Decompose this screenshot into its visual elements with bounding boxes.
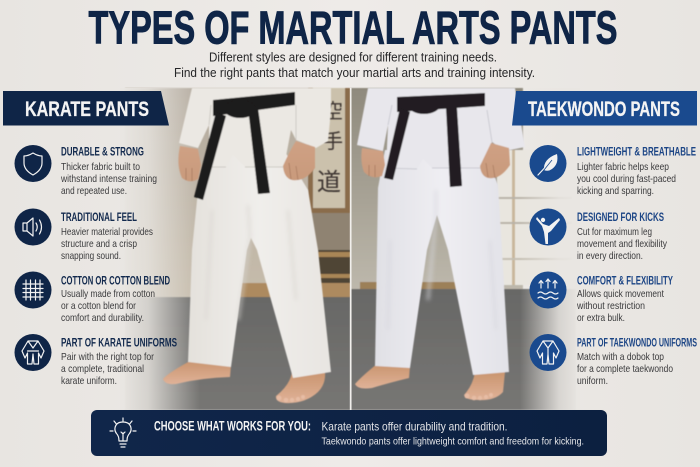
feature: comfort and flexibility: Allows quick movement	[577, 288, 664, 300]
feature: part of karate uniforms	[14, 334, 177, 387]
icon: karate gi	[14, 334, 52, 371]
feature: lightweight and breathable: kicking and sparring.	[577, 185, 654, 197]
feature: cotton or cotton blend: Usually made from cotton	[61, 288, 155, 300]
feet	[355, 364, 505, 400]
photo: taekwondo pants	[351, 88, 580, 410]
taekwondo figure	[355, 88, 525, 400]
wall scroll calligraphy: 手	[323, 130, 343, 153]
feature: durable and strong	[14, 144, 157, 197]
left edge fade	[120, 88, 200, 410]
subtitle	[174, 50, 535, 80]
pant folds	[206, 205, 296, 320]
feature: lightweight and breathable: you cool during fast-paced	[577, 173, 676, 185]
banner: karate pants: KARATE PANTS	[25, 97, 149, 121]
callout: choose what works for you	[91, 410, 607, 456]
icon: arrows over waves	[530, 272, 566, 308]
icon: kicking figure	[530, 208, 566, 246]
icon: light bulb	[110, 418, 136, 447]
feature: traditional feel: TRADITIONAL FEEL	[61, 210, 137, 224]
feature: comfort and flexibility: or extra bulk.	[577, 312, 625, 324]
banner: taekwondo pants	[512, 91, 697, 126]
wall scroll calligraphy: 空	[323, 100, 343, 123]
feature: durable and strong: and repeated use.	[61, 185, 127, 197]
feature: part of taekwondo uniforms	[530, 334, 697, 387]
feature: durable and strong: withstand intense training	[60, 173, 157, 185]
icon: shield	[14, 145, 52, 182]
feature: cotton or cotton blend: COTTON OR COTTON BLEND	[61, 274, 170, 288]
icon: speaker	[14, 208, 52, 246]
feature: designed for kicks: Cut for maximum leg	[577, 226, 652, 238]
pants	[375, 150, 509, 375]
photo divider	[350, 88, 352, 410]
hands	[361, 143, 510, 178]
feature: part of taekwondo uniforms: for a complete taekwondo	[577, 363, 673, 375]
right edge fade	[520, 88, 580, 410]
feature: part of karate uniforms: karate uniform.	[61, 375, 117, 387]
panel: taekwondo features	[530, 144, 697, 387]
feature: designed for kicks: in every direction.	[577, 250, 643, 262]
feature: lightweight and breathable: Lighter fabric helps keep	[577, 161, 669, 173]
callout: choose what works for you: Taekwondo pants offer lightweight comfort and freedom for kicking.	[322, 436, 584, 448]
panel: karate features	[14, 144, 177, 387]
pant folds	[388, 190, 496, 330]
subtitle: Different styles are designed for different training needs.	[209, 50, 497, 64]
photo backdrop: dojo wall and floor	[125, 88, 350, 410]
callout: choose what works for you: CHOOSE WHAT WORKS FOR YOU:	[154, 418, 311, 434]
wall scroll calligraphy	[317, 100, 343, 196]
feature: comfort and flexibility: without restriction	[576, 300, 645, 312]
feature: traditional feel	[14, 208, 153, 262]
feature: cotton or cotton blend	[14, 272, 170, 324]
feature: comfort and flexibility	[530, 272, 673, 324]
feature: part of karate uniforms: a complete, traditional	[61, 363, 144, 375]
feature: durable and strong: Thicker fabric built to	[61, 161, 140, 173]
callout: choose what works for you: Karate pants offer durability and tradition.	[322, 420, 508, 434]
black belt	[194, 92, 295, 200]
icon: fabric weave	[14, 272, 52, 308]
hands	[178, 141, 315, 181]
feature: durable and strong: DURABLE & STRONG	[61, 144, 144, 158]
karate figure	[163, 88, 331, 403]
feature: cotton or cotton blend: or a cotton blend for	[61, 300, 136, 312]
feature: traditional feel: snapping sound.	[61, 250, 121, 262]
jacket	[179, 88, 331, 167]
feature: traditional feel: structure and a crisp	[61, 238, 137, 250]
feet	[163, 361, 325, 403]
feature: part of taekwondo uniforms: Match with a dobok top	[577, 351, 664, 363]
feature: part of karate uniforms: Pair with the right top for	[61, 351, 154, 363]
black belt	[384, 93, 485, 187]
photo backdrop: wall, window and floor	[351, 88, 576, 410]
feature: part of taekwondo uniforms: uniform.	[577, 375, 608, 387]
icon: feather	[530, 145, 566, 182]
photo: karate pants	[120, 88, 350, 410]
feature: lightweight and breathable	[530, 144, 696, 197]
wall scroll calligraphy: 道	[317, 169, 341, 196]
jacket	[357, 88, 525, 169]
feature: designed for kicks	[530, 208, 668, 262]
feature: part of karate uniforms: PART OF KARATE UNIFORMS	[61, 336, 177, 350]
feature: designed for kicks: movement and flexibility	[577, 238, 668, 250]
feature: cotton or cotton blend: comfort and durability.	[61, 312, 144, 324]
banner: karate pants	[3, 91, 169, 126]
icon: dobok	[530, 334, 566, 371]
feature: traditional feel: Heavier material provides	[61, 226, 153, 238]
subtitle: Find the right pants that match your martial arts and training intensity.	[174, 65, 535, 80]
pants	[188, 150, 331, 378]
